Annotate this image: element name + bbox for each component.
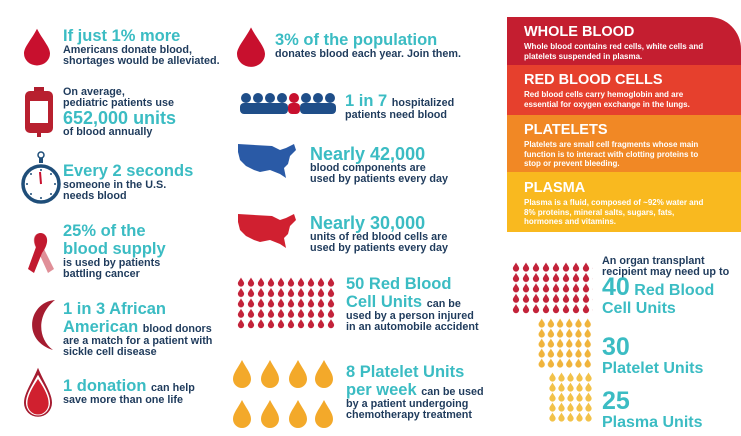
chart: 30 platelet drops: [538, 318, 592, 368]
stat: 1% more: Americans donate blood,: [63, 44, 192, 56]
stat: 1 donation: [63, 377, 195, 406]
stat: 25 plasma units: Plasma Units: [602, 414, 702, 431]
stat: 25% blood supply: is used by patients: [63, 257, 160, 269]
chart: 8 platelet drops: [233, 360, 333, 428]
stat: 3% of the population: donates blood each year. Join them.: [275, 48, 461, 60]
stat: 8 platelet units: 8 Platelet Units: [346, 363, 464, 381]
stat: 1% more: shortages would be alleviated.: [63, 55, 220, 67]
stat: organ transplant: An organ transplant: [602, 255, 705, 267]
stat: nearly 42,000: [310, 144, 448, 185]
stat: every 2 seconds: Every 2 seconds: [63, 162, 193, 180]
band: plasma: Plasma is a fluid, composed of ~92% water and 8% proteins, mineral salts, sugars, fats, hormones and vitamins.: [524, 198, 703, 226]
band: red blood cells: [507, 65, 741, 115]
icon: ribbon: [28, 233, 54, 273]
stat: 30 platelet units: 30: [602, 333, 630, 361]
stat: 50 red blood cell units: in an automobile accident: [346, 321, 479, 333]
band: platelets: [507, 115, 741, 172]
band: platelets: PLATELETS: [524, 122, 608, 138]
stat: nearly 30,000: used by patients every day: [310, 242, 448, 254]
stat: 1 in 3 African American: sickle cell disease: [63, 346, 157, 358]
stat: 652,000 units: [63, 86, 176, 138]
stat: 1% more: [63, 27, 220, 67]
stat: 1 in 3 African American: [63, 300, 212, 358]
stat: 1% more: If just 1% more: [63, 27, 180, 45]
stat: nearly 30,000: units of red blood cells are: [310, 231, 447, 243]
band: red blood cells: Red blood cells carry hemoglobin and are essential for oxygen exchange in the lungs.: [524, 90, 690, 108]
stat: 652,000 units: 652,000 units: [63, 108, 176, 128]
stat: every 2 seconds: [63, 162, 193, 202]
icon: blood drop outlined: [24, 368, 52, 417]
stat: 1 donation: save more than one life: [63, 394, 183, 406]
stat: 1 in 3 African American: 1 in 3 African: [63, 300, 166, 318]
stat: 1 in 3 African American: are a match for a patient with: [63, 335, 212, 347]
stat: 1 in 7: [345, 92, 454, 121]
icon: people row: [240, 93, 336, 114]
stat: every 2 seconds: needs blood: [63, 190, 127, 202]
stat: 50 red blood cell units: Cell Units can be: [346, 293, 461, 311]
stat: 50 red blood cell units: 50 Red Blood: [346, 275, 451, 293]
stat: nearly 42,000: used by patients every day: [310, 173, 448, 185]
stat: 50 red blood cell units: used by a person injured: [346, 310, 474, 322]
stat: 3% of the population: 3% of the population: [275, 31, 437, 49]
stat: 8 platelet units: chemotherapy treatment: [346, 409, 472, 421]
stat: 25% blood supply: [63, 222, 166, 280]
stat: 1 in 7: patients need blood: [345, 109, 447, 121]
icon: sickle cell crescent: [32, 300, 55, 350]
stat: 1 in 3 African American: American blood donors: [63, 318, 212, 336]
stat: 25% blood supply: 25% of the: [63, 222, 146, 240]
chart: 25 plasma drops: [549, 372, 592, 422]
stat: nearly 30,000: [310, 213, 448, 254]
chart: 50 red drops: [238, 278, 334, 328]
band: red blood cells: RED BLOOD CELLS: [524, 72, 663, 88]
stat: every 2 seconds: someone in the U.S.: [63, 179, 166, 191]
icon: US map blue: [238, 144, 296, 178]
icon: blood bag: [25, 87, 53, 137]
band: platelets: Platelets are small cell fragments whose main function is to interact with clotting proteins to stop or prevent bleeding.: [524, 140, 698, 168]
band: whole blood: [507, 17, 741, 65]
stat: 652,000 units: pediatric patients use: [63, 97, 174, 109]
icon: stopwatch: [21, 151, 61, 204]
stat: 8 platelet units: per week can be used: [346, 381, 484, 399]
stat: organ transplant: recipient may need up to: [602, 266, 729, 278]
stat: 3% of the population: [275, 31, 461, 60]
stat: organ transplant: [602, 255, 729, 317]
stat: 652,000 units: of blood annually: [63, 126, 152, 138]
band: plasma: PLASMA: [524, 180, 585, 196]
icon: US map red: [238, 214, 296, 248]
stat: 30 platelet units: Platelet Units: [602, 360, 703, 377]
icon: blood drop 1: [24, 28, 50, 66]
stat: organ transplant: 40 Red Blood: [602, 273, 714, 301]
band: whole blood: WHOLE BLOOD: [524, 24, 634, 40]
band: whole blood: Whole blood contains red cells, white cells and platelets suspended in plasma.: [524, 42, 703, 60]
chart: 40 red drops: [512, 262, 593, 314]
stat: 25% blood supply: battling cancer: [63, 268, 140, 280]
stat: 25 plasma units: [602, 387, 702, 431]
stat: 1 donation: 1 donation can help: [63, 377, 195, 395]
stat: 8 platelet units: [346, 363, 484, 421]
stat: 25% blood supply: blood supply: [63, 240, 166, 258]
stat: organ transplant: Cell Units: [602, 300, 676, 317]
icon: blood drop 2: [237, 28, 265, 67]
stat: 8 platelet units: by a patient undergoing: [346, 398, 468, 410]
stat: 652,000 units: On average,: [63, 86, 125, 98]
stat: 25 plasma units: 25: [602, 387, 630, 415]
stat: 1 in 7: 1 in 7 hospitalized: [345, 92, 454, 110]
stat: nearly 42,000: Nearly 42,000: [310, 144, 425, 164]
stat: 50 red blood cell units: [346, 275, 479, 333]
stat: 30 platelet units: [602, 333, 703, 377]
stat: nearly 42,000: blood components are: [310, 162, 426, 174]
band: plasma: [507, 172, 741, 232]
panel: blood components: [507, 17, 741, 232]
stat: nearly 30,000: Nearly 30,000: [310, 213, 425, 233]
